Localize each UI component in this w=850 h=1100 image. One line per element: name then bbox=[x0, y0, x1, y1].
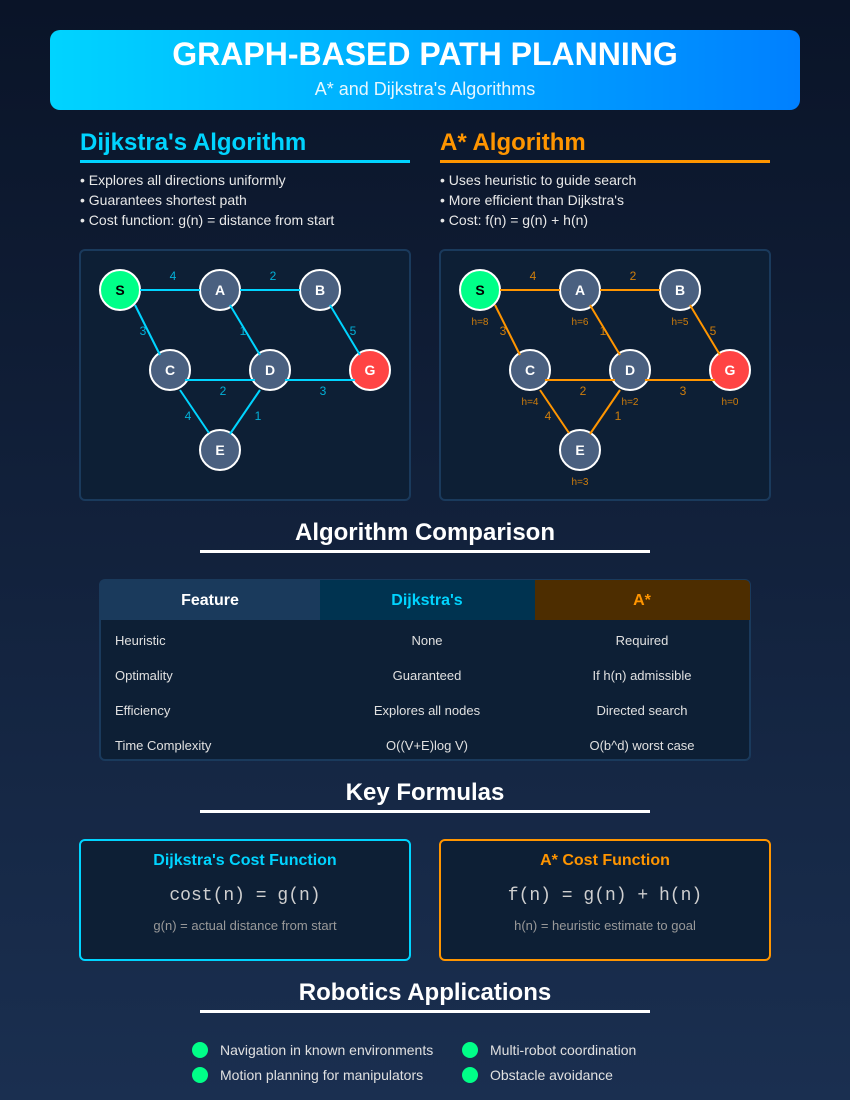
graph nodes: E bbox=[215, 442, 225, 458]
applications list bbox=[192, 1042, 636, 1083]
graph nodes: C bbox=[165, 362, 175, 378]
row: Optimality: Optimality bbox=[115, 668, 173, 683]
item: obstacle avoidance: Obstacle avoidance bbox=[490, 1067, 613, 1083]
table header: A* bbox=[633, 592, 652, 609]
graph nodes bbox=[100, 270, 390, 470]
graph edges bbox=[135, 290, 360, 434]
graph nodes: G bbox=[725, 362, 736, 378]
edge weights: 4 bbox=[170, 269, 177, 283]
item: multi-robot: Multi-robot coordination bbox=[490, 1042, 636, 1058]
header banner bbox=[50, 30, 800, 110]
heuristic labels: h=5 bbox=[672, 317, 689, 328]
bullet list: A*: • Uses heuristic to guide search bbox=[440, 172, 636, 188]
panel: A* description bbox=[440, 129, 770, 228]
row: Optimality bbox=[115, 668, 691, 683]
graph nodes: B bbox=[315, 282, 325, 298]
graph panel: A* bbox=[440, 250, 770, 500]
card title: Dijkstra's Cost Function bbox=[153, 852, 337, 869]
heuristic labels: h=4 bbox=[522, 397, 539, 408]
bullet list: A*: • More efficient than Dijkstra's bbox=[440, 192, 624, 208]
row: Time Complexity: O(b^d) worst case bbox=[589, 738, 695, 753]
section heading: Robotics Applications bbox=[200, 979, 650, 1013]
section heading: Key Formulas: Key Formulas bbox=[346, 779, 504, 806]
edge weights: 1 bbox=[615, 409, 622, 423]
section heading: Algorithm Comparison bbox=[200, 519, 650, 553]
formula: cost(n) = g(n) bbox=[169, 886, 321, 906]
graph nodes: B bbox=[675, 282, 685, 298]
formula: f(n) = g(n) + h(n) bbox=[508, 886, 702, 906]
item: motion planning: Motion planning for manipulators bbox=[220, 1067, 423, 1083]
row: Heuristic: Required bbox=[616, 633, 668, 648]
edge weights bbox=[500, 269, 717, 423]
row: Efficiency: Directed search bbox=[596, 703, 688, 718]
table header bbox=[100, 580, 750, 620]
row: Efficiency bbox=[115, 703, 688, 718]
formula card: A* bbox=[440, 840, 770, 960]
subtitle: A* and Dijkstra's Algorithms bbox=[315, 79, 535, 99]
graph edges bbox=[495, 290, 720, 434]
row: Time Complexity: O((V+E)log V) bbox=[386, 738, 468, 753]
section heading: Robotics Applications: Robotics Applications bbox=[299, 979, 551, 1006]
row: Time Complexity bbox=[115, 738, 695, 753]
row: Heuristic: Heuristic bbox=[115, 633, 166, 648]
edge weights: 4 bbox=[530, 269, 537, 283]
table header: Dijkstra's bbox=[391, 592, 463, 609]
heuristic labels: h=0 bbox=[722, 397, 739, 408]
heading: Dijkstra's Algorithm: Dijkstra's Algorithm bbox=[80, 129, 306, 156]
heuristic labels bbox=[472, 317, 739, 488]
graph nodes: A bbox=[575, 282, 585, 298]
heading: A* Algorithm: A* Algorithm bbox=[440, 129, 586, 156]
panel: Dijkstra's description bbox=[80, 129, 410, 228]
edge weights: 5 bbox=[350, 324, 357, 338]
edge weights: 1 bbox=[240, 324, 247, 338]
row: Heuristic bbox=[115, 633, 668, 648]
graph nodes bbox=[460, 270, 750, 470]
edge weights: 3 bbox=[140, 324, 147, 338]
heuristic labels: h=2 bbox=[622, 397, 639, 408]
graph nodes: D bbox=[265, 362, 275, 378]
card title: A* Cost Function bbox=[540, 852, 670, 869]
edge weights: 1 bbox=[600, 324, 607, 338]
comparison table bbox=[100, 580, 750, 760]
graph nodes: S bbox=[115, 282, 125, 298]
heuristic labels: h=8 bbox=[472, 317, 489, 328]
graph nodes: A bbox=[215, 282, 225, 298]
edge weights: 4 bbox=[185, 409, 192, 423]
bullet list: Dijkstra's: • Cost function: g(n) = distance from start bbox=[80, 212, 334, 228]
edge weights: 3 bbox=[680, 384, 687, 398]
bullet list: Dijkstra's: • Explores all directions uniformly bbox=[80, 172, 286, 188]
section heading: Key Formulas bbox=[200, 779, 650, 813]
row: Heuristic: None bbox=[411, 633, 443, 648]
edge weights: 1 bbox=[255, 409, 262, 423]
edge weights: 2 bbox=[580, 384, 587, 398]
row: Efficiency: Efficiency bbox=[115, 703, 171, 718]
section heading: Algorithm Comparison: Algorithm Comparison bbox=[295, 519, 555, 546]
graph nodes: S bbox=[475, 282, 485, 298]
formula note: g(n) = actual distance from start bbox=[153, 918, 337, 933]
bullet list: Dijkstra's: • Guarantees shortest path bbox=[80, 192, 247, 208]
graph nodes: E bbox=[575, 442, 585, 458]
edge weights: 2 bbox=[220, 384, 227, 398]
bullet list: A* bbox=[440, 172, 636, 228]
row: Time Complexity: Time Complexity bbox=[115, 738, 212, 753]
formula note: h(n) = heuristic estimate to goal bbox=[514, 918, 696, 933]
edge weights: 4 bbox=[545, 409, 552, 423]
heuristic labels: h=3 bbox=[572, 477, 589, 488]
edge weights: 3 bbox=[500, 324, 507, 338]
item: navigation: Navigation in known environments bbox=[220, 1042, 433, 1058]
bullet list: Dijkstra's bbox=[80, 172, 334, 228]
title: GRAPH-BASED PATH PLANNING bbox=[172, 36, 678, 72]
graph nodes: D bbox=[625, 362, 635, 378]
row: Efficiency: Explores all nodes bbox=[374, 703, 481, 718]
bullet list: A*: • Cost: f(n) = g(n) + h(n) bbox=[440, 212, 588, 228]
graph nodes: G bbox=[365, 362, 376, 378]
row: Optimality: Guaranteed bbox=[393, 668, 461, 683]
row: Optimality: If h(n) admissible bbox=[593, 668, 691, 683]
graph panel: Dijkstra's bbox=[80, 250, 410, 500]
edge weights: 3 bbox=[320, 384, 327, 398]
formula card: Dijkstra's bbox=[80, 840, 410, 960]
table header: Feature bbox=[181, 592, 239, 609]
edge weights: 2 bbox=[630, 269, 637, 283]
graph nodes: C bbox=[525, 362, 535, 378]
edge weights: 5 bbox=[710, 324, 717, 338]
edge weights bbox=[140, 269, 357, 423]
edge weights: 2 bbox=[270, 269, 277, 283]
heuristic labels: h=6 bbox=[572, 317, 589, 328]
